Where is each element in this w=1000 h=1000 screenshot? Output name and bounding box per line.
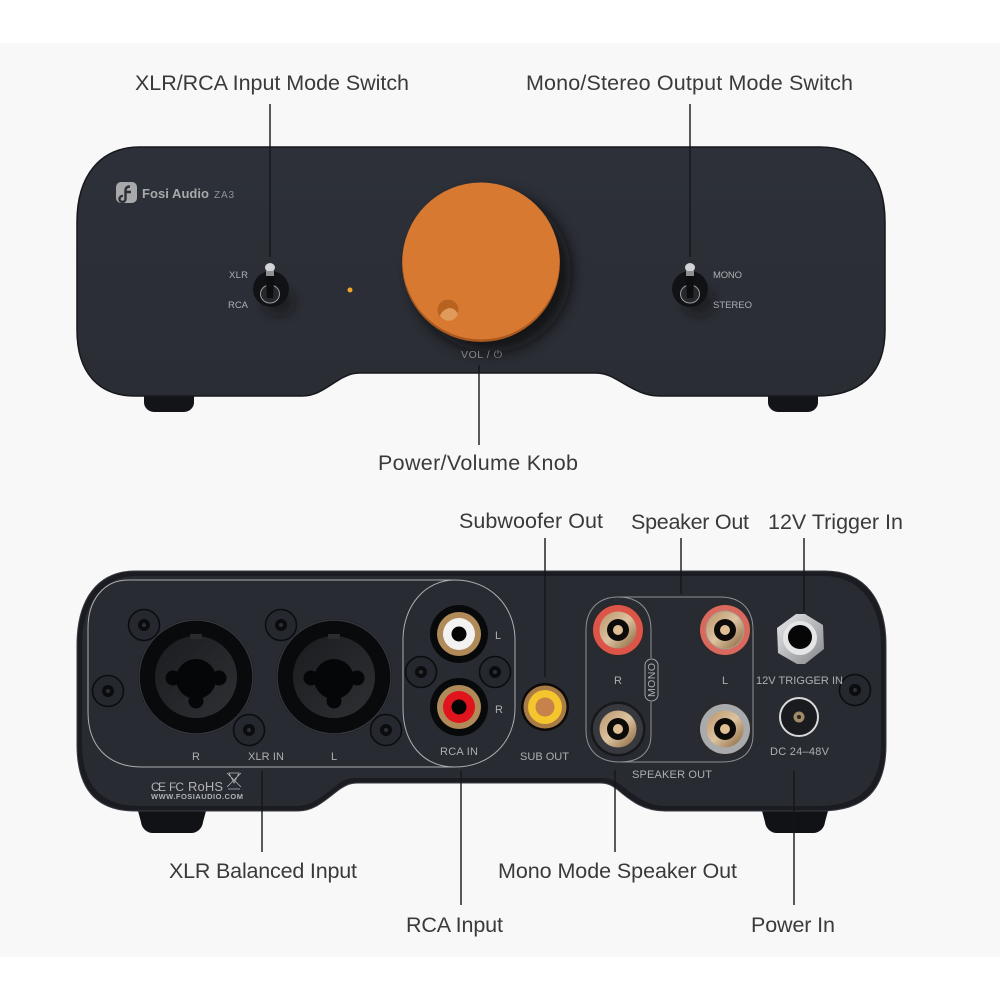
callout: power in: Power In <box>751 913 835 937</box>
XLR labels: XLR IN <box>248 751 284 763</box>
speaker labels <box>614 675 728 781</box>
volume label: VOL / ⏻ <box>461 349 503 361</box>
volume knob <box>402 182 571 352</box>
front feet <box>144 396 818 412</box>
trigger label: 12V TRIGGER IN <box>756 675 843 687</box>
RCA input red <box>430 678 488 736</box>
brand logo: ZA3 <box>214 190 234 201</box>
left toggle switch: RCA <box>228 300 249 311</box>
callout: RCA input: RCA Input <box>406 913 503 937</box>
RCA labels <box>440 630 503 758</box>
front chassis <box>77 147 885 396</box>
rear chassis <box>77 571 886 811</box>
callout: 12V trigger in: 12V Trigger In <box>768 510 903 534</box>
speaker post R red <box>590 602 646 658</box>
right toggle switch: STEREO <box>713 300 752 311</box>
DC jack <box>780 698 818 736</box>
brand logo: Fosi Audio <box>142 186 209 201</box>
RCA labels: RCA IN <box>440 746 478 758</box>
panel screws <box>92 610 870 746</box>
XLR and RCA outline <box>88 580 515 767</box>
callout: speaker out <box>631 510 749 594</box>
callout: subwoofer out: Subwoofer Out <box>459 509 603 533</box>
RCA input white <box>430 605 488 663</box>
XLR connector R <box>138 619 254 735</box>
compliance marks: FC <box>169 780 184 794</box>
rear panel view <box>77 571 886 833</box>
speaker post R black <box>590 702 646 756</box>
callout: XLR balanced input: XLR Balanced Input <box>169 859 357 883</box>
compliance marks: WWW.FOSIAUDIO.COM <box>151 792 243 801</box>
compliance marks: RoHS <box>188 779 223 794</box>
right toggle switch: MONO <box>713 270 742 281</box>
trigger jack <box>777 614 824 664</box>
compliance marks <box>151 773 243 801</box>
subwoofer jack <box>521 683 569 731</box>
left toggle switch <box>228 263 295 316</box>
speaker outline <box>586 597 753 762</box>
XLR connector L <box>276 619 392 735</box>
callout: 12V trigger in <box>768 510 903 612</box>
mono badge: MONO <box>646 663 658 697</box>
RCA labels: R <box>495 704 503 716</box>
status LED <box>348 288 352 292</box>
XLR labels: L <box>331 751 337 763</box>
callout: power/volume knob: Power/Volume Knob <box>378 451 578 475</box>
speaker labels: SPEAKER OUT <box>632 769 712 781</box>
speaker post L gray <box>698 702 752 756</box>
callout: mono/stereo output mode switch: Mono/Stereo Output Mode Switch <box>526 71 853 95</box>
subwoofer label: SUB OUT <box>520 751 569 763</box>
callout: mono mode speaker out: Mono Mode Speaker Out <box>498 859 737 883</box>
compliance marks: C E <box>151 780 166 794</box>
right toggle switch <box>672 263 752 316</box>
left toggle switch: XLR <box>229 270 248 281</box>
callout: speaker out: Speaker Out <box>631 510 749 534</box>
XLR labels <box>192 751 337 763</box>
DC label: DC 24–48V <box>770 746 830 758</box>
brand logo <box>116 182 234 203</box>
speaker post L red <box>698 602 752 658</box>
XLR labels: R <box>192 751 200 763</box>
rear feet <box>138 811 828 833</box>
speaker labels: L <box>722 675 728 687</box>
RCA labels: L <box>495 630 501 642</box>
callout: XLR/RCA input mode switch: XLR/RCA Input Mode Switch <box>135 71 409 95</box>
speaker labels: R <box>614 675 622 687</box>
front panel view <box>77 147 885 412</box>
